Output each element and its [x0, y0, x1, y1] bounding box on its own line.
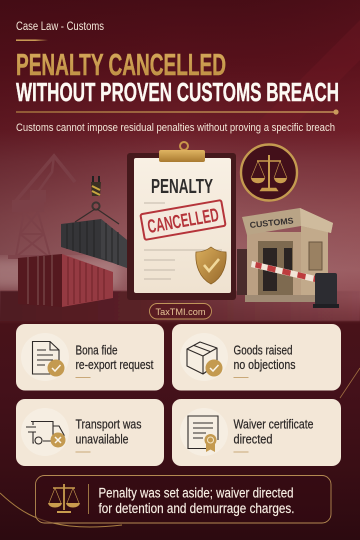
- decorative gold curve lower right: [340, 368, 360, 398]
- card: waiver: [172, 399, 341, 466]
- card text: Transport was: [76, 418, 142, 432]
- label: Case Law - Customs: Case Law - Customs: [16, 21, 104, 33]
- card text: re-export request: [76, 358, 154, 372]
- icon: scales: [48, 484, 80, 513]
- booth door: [258, 241, 293, 295]
- conclusion panel: [36, 476, 331, 523]
- card text: Waiver certificate: [234, 418, 314, 432]
- booth base: [245, 295, 317, 302]
- heading: penalty cancelled: PENALTY CANCELLED: [16, 48, 226, 82]
- icon: truck with cross: [26, 422, 66, 448]
- short gold accent line: [16, 40, 48, 41]
- card text: Bona fide: [76, 344, 118, 358]
- dark gate behind booth: [237, 249, 250, 295]
- website pill: [150, 304, 212, 319]
- card text: unavailable: [76, 432, 129, 446]
- card: goods raised: [172, 324, 341, 390]
- booth roof: [242, 208, 333, 235]
- booth window: [309, 242, 322, 270]
- card text: no objections: [234, 358, 296, 372]
- barrier arm: [251, 261, 324, 284]
- stamp: cancelled: CANCELLED: [146, 205, 221, 238]
- barrier post: [313, 273, 339, 308]
- illustration: clipboard: [127, 142, 236, 300]
- card text: Goods raised: [234, 344, 293, 358]
- icon: document with check: [32, 342, 64, 376]
- illustration: crane silhouette: [8, 156, 75, 259]
- illustration: customs booth: [237, 208, 339, 308]
- icon: scales seal: [241, 144, 297, 200]
- document lines: [144, 203, 222, 279]
- illustration: hook and container stack: [18, 176, 127, 307]
- black container: [61, 219, 127, 268]
- clipboard board: [127, 153, 236, 300]
- card text: directed: [234, 432, 273, 446]
- paper: [134, 158, 231, 293]
- heading rule with dot: [16, 109, 339, 115]
- icon: gold shield with check: [196, 247, 226, 284]
- stamp: cancelled: [140, 200, 226, 240]
- card: transport: [16, 399, 164, 466]
- sign: customs: CUSTOMS: [249, 215, 294, 230]
- red container: [18, 254, 113, 307]
- icon: box with check: [187, 342, 222, 376]
- decorative gold swoosh: [0, 493, 122, 527]
- divider: [88, 484, 89, 514]
- booth walls: [247, 232, 301, 300]
- clip: [159, 142, 205, 162]
- conclusion text: Penalty was set aside; waiver directed: [98, 486, 294, 500]
- crane hook: [75, 176, 119, 224]
- card: bona fide: [16, 324, 164, 390]
- document word: penalty: PENALTY: [151, 175, 213, 198]
- website pill: TaxTMI.com: [156, 307, 206, 318]
- icon: certificate with ribbon: [188, 416, 218, 452]
- conclusion text: for detention and demurrage charges.: [98, 501, 294, 516]
